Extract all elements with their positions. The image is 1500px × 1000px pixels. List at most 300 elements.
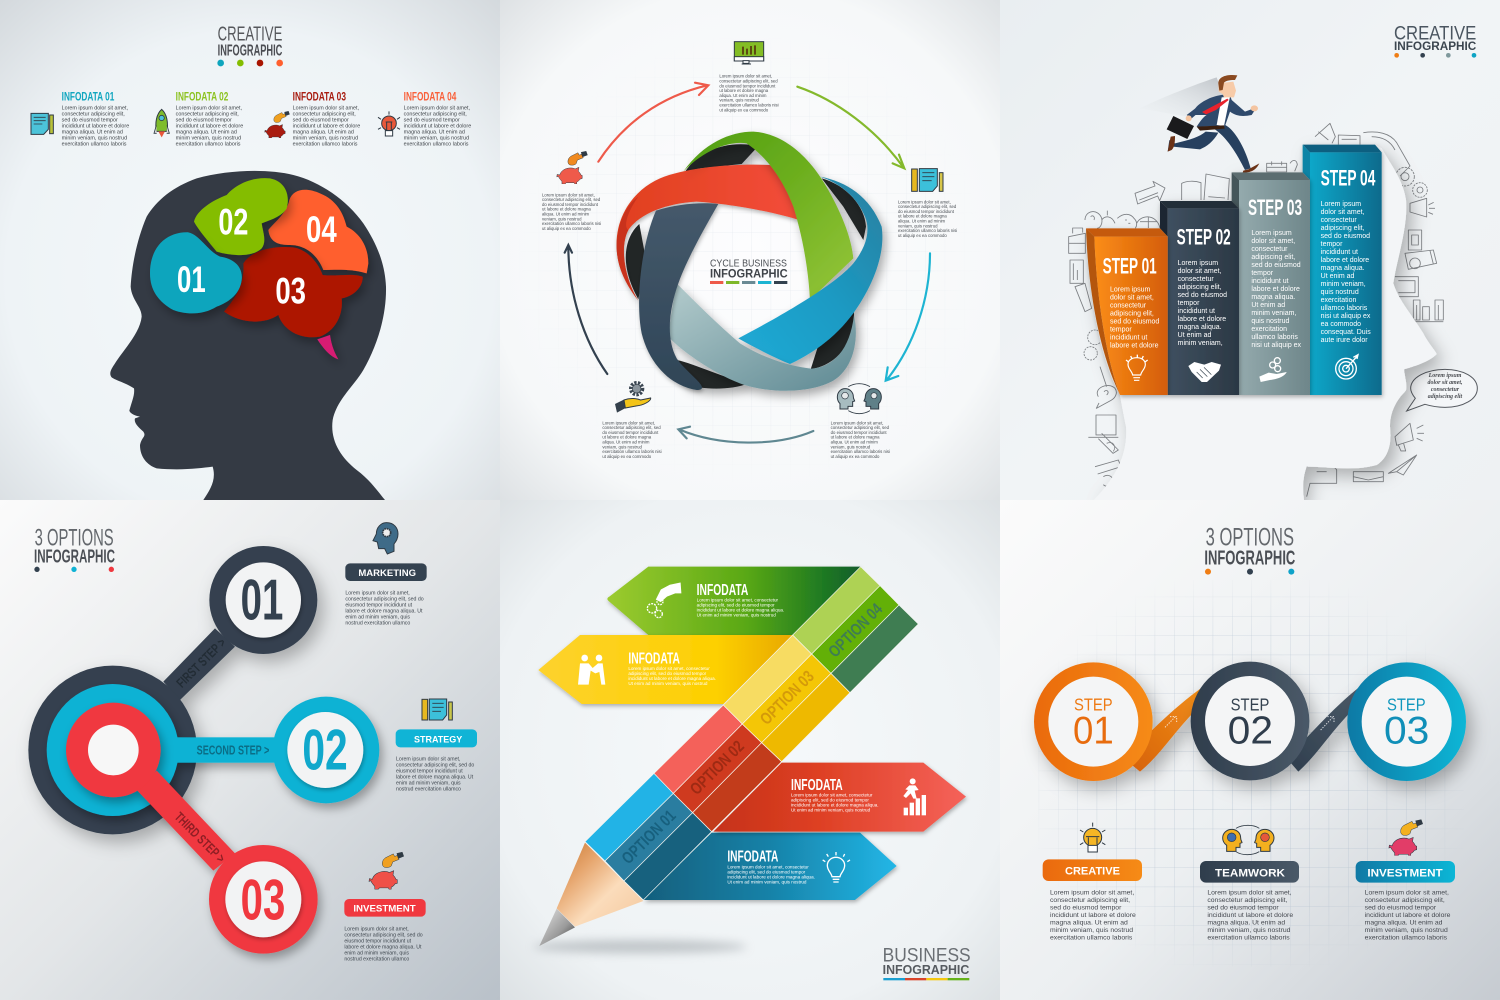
step 02 text: dolor sit amet, [1178, 268, 1222, 275]
text: top: ut labore et dolore magna [719, 88, 769, 93]
hub dark ring and connector 01 [28, 546, 317, 834]
text: left: ut aliquip ex ea commodo [542, 226, 591, 231]
infodata red [791, 777, 879, 813]
icon: monitor chart [734, 42, 764, 64]
infodata 01: minim veniam, quis nostrud [62, 135, 127, 141]
arrow yellow [538, 635, 793, 704]
infodata 02: magna aliqua. Ut enim ad [176, 129, 237, 135]
pencil body [539, 567, 918, 946]
text: teamwork: Lorem ipsum dolor sit amet, [1207, 889, 1292, 896]
icon: bulb white [1126, 355, 1148, 380]
text: creative: exercitation ullamco laboris [1050, 935, 1133, 942]
text: investment: consectetur adipiscing elit, sed do [344, 933, 423, 939]
pill: marketing [345, 563, 427, 581]
text: creative: consectetur adipiscing elit, [1050, 897, 1130, 904]
icon: piggy bank with hand [265, 111, 290, 138]
text: right: aliqua. Ut enim ad minim [898, 219, 946, 224]
infodata yellow: INFODATA [628, 650, 680, 667]
step 03 label: 03 [1384, 708, 1429, 752]
step 02 text: magna aliqua. [1178, 324, 1222, 331]
infodata red: incididunt ut labore et dolore magna aliqua. [791, 803, 879, 808]
text: teamwork: sed do eiusmod tempor [1207, 904, 1279, 911]
pill: teamwork [1200, 861, 1299, 883]
text: marketing: enim ad minim veniam, quis [345, 614, 410, 620]
option labels: OPTION 02 [686, 737, 748, 799]
icon: light bulb [378, 111, 400, 136]
text: bottom right: ut aliquip ex ea commodo [831, 454, 880, 459]
center title: CYCLE BUSINESS [710, 259, 787, 270]
icon: hand with gears [1259, 358, 1287, 382]
arrow: cyan [886, 253, 930, 381]
infodata yellow: incididunt ut labore et dolore magna aliqua. [628, 676, 716, 681]
step 04 text: consequat. Duis [1321, 329, 1371, 336]
pill: strategy: STRATEGY [414, 734, 463, 744]
text: investment: minim veniam, quis nostrud [1365, 927, 1448, 934]
text: investment: labore et dolore magna aliqua. Ut [344, 945, 422, 951]
arrow blue [643, 833, 897, 900]
doodles around the head [1069, 123, 1443, 497]
text: top: Lorem ipsum dolor sit amet, [719, 74, 772, 79]
infodata 03: INFODATA 03 [293, 89, 346, 103]
step 01 text [1103, 253, 1159, 350]
arrow green [607, 567, 861, 635]
text: investment: nostrud exercitation ullamco [344, 957, 409, 963]
lobe 01 [150, 232, 242, 313]
lobe 03: 03 [275, 270, 306, 312]
arrow: navy [565, 245, 607, 374]
step 01 text: Lorem ipsum [1110, 287, 1151, 294]
text: strategy: Lorem ipsum dolor sit amet, [396, 757, 460, 763]
infodata green: incididunt ut labore et dolore magna aliqua. [697, 608, 784, 613]
text: right: veniam, quis nostrud [898, 223, 938, 228]
icon: target [1336, 355, 1358, 379]
title: INFOGRAPHIC [1204, 548, 1295, 570]
text: top: veniam, quis nostrud [719, 98, 759, 103]
head silhouette [110, 171, 386, 500]
title: INFOGRAPHIC [1394, 39, 1476, 53]
infodata 03: minim veniam, quis nostrud [293, 135, 358, 141]
step 01 text: labore et dolore [1110, 343, 1159, 350]
text: creative: Lorem ipsum dolor sit amet, [1050, 889, 1134, 896]
businessman running [1167, 75, 1259, 173]
text: marketing: eiusmod tempor incididunt ut [345, 602, 413, 608]
panel: three step rings infographic [1000, 500, 1500, 1000]
infodata 02: exercitation ullamco laboris [176, 141, 241, 147]
panel: brain infographic [0, 0, 500, 500]
step 03 text [1248, 195, 1302, 349]
text: investment: exercitation ullamco laboris [1365, 935, 1448, 942]
infodata 01: sed do eiusmod tempor [62, 117, 118, 123]
step 03 text: consectetur [1251, 246, 1288, 253]
head cut-out [1086, 145, 1437, 500]
infodata 04: magna aliqua. Ut enim ad [404, 129, 465, 135]
step 04 text: ullamco laboris [1321, 305, 1368, 312]
panel: three steps hub infographic [0, 500, 500, 1000]
step 03 text: STEP 03 [1248, 195, 1302, 220]
infodata green: INFODATA [697, 582, 749, 599]
infodata blue: Lorem ipsum dolor sit amet, consectetur [727, 864, 809, 869]
text: marketing: consectetur adipiscing elit, sed do [345, 596, 424, 602]
infodata yellow: Lorem ipsum dolor sit amet, consectetur [628, 666, 710, 671]
icon: hand with gears [647, 583, 681, 618]
text: strategy: nostrud exercitation ullamco [396, 787, 461, 793]
icon: handshake people [578, 655, 605, 685]
title [1394, 23, 1476, 58]
step 04 text: tempor [1321, 241, 1343, 248]
text: investment: magna aliqua. Ut enim ad [1365, 920, 1443, 927]
infodata green [697, 582, 784, 618]
infodata 02: minim veniam, quis nostrud [176, 135, 241, 141]
text: strategy: eiusmod tempor incididunt ut [396, 769, 463, 775]
infodata yellow: adipiscing elit, sed do eiusmod tempor [628, 671, 707, 676]
title: creative infographic [217, 23, 283, 66]
infodata green: adipiscing elit, sed do eiusmod tempor [697, 603, 775, 608]
infodata 04: consectetur adipiscing elit, [404, 111, 467, 117]
text: creative: minim veniam, quis nostrud [1050, 927, 1133, 934]
bubble with text: dolor sit amet, [1427, 380, 1463, 386]
text: strategy: enim ad minim veniam, quis [396, 781, 461, 787]
icon: handshake [1188, 362, 1221, 382]
step 04 text: nisi ut aliquip ex [1321, 313, 1371, 320]
text: right: exercitation ullamco laboris nisi [898, 228, 957, 233]
icon: note and pencil [31, 113, 53, 134]
infodata blue: adipiscing elit, sed do eiusmod tempor [727, 869, 806, 874]
text: creative: sed do eiusmod tempor [1050, 904, 1122, 911]
text: investment: consectetur adipiscing elit, [1365, 897, 1445, 904]
step 02 text: tempor [1178, 300, 1200, 307]
text: teamwork: incididunt ut labore et dolore [1207, 912, 1293, 919]
text: teamwork: minim veniam, quis nostrud [1207, 927, 1291, 934]
step 04 text: exercitation [1321, 297, 1356, 304]
text: marketing: Lorem ipsum dolor sit amet, [345, 590, 410, 596]
step 04 text: Lorem ipsum [1321, 201, 1361, 208]
infodata green: Lorem ipsum dolor sit amet, consectetur [697, 598, 779, 603]
step 01 text: tempor [1110, 327, 1132, 334]
step 04 text: aute irure dolor [1321, 337, 1368, 344]
circle 02 [287, 712, 363, 788]
circle 02: 02 [302, 719, 348, 783]
connector label: third step: THIRD STEP > [172, 809, 228, 866]
hub centre [88, 725, 139, 775]
step 03 text: labore et dolore [1251, 286, 1300, 293]
infodata 04: Lorem ipsum dolor sit amet, [404, 105, 470, 111]
infodata 04: incididunt ut labore et dolore [404, 123, 471, 129]
ribbons knot [617, 132, 882, 391]
step 02 text: Lorem ipsum [1178, 260, 1218, 267]
step 04 text: ea commodo [1321, 321, 1361, 328]
text: top: ut aliquip ex ea commodo [719, 107, 769, 112]
text: left: veniam, quis nostrud [542, 216, 582, 221]
lobe 01: 01 [177, 258, 206, 300]
infodata 01 [62, 89, 129, 147]
pill: marketing: MARKETING [358, 568, 416, 578]
bubble with text: consectetur [1431, 387, 1460, 393]
infodata 02: incididunt ut labore et dolore [176, 123, 243, 129]
infodata 01: Lorem ipsum dolor sit amet, [62, 105, 128, 111]
infodata blue: Ut enim ad minim veniam, quis nostrud [727, 879, 807, 884]
icon: teamwork heads [1223, 825, 1274, 855]
cyan ring and connector 02 [47, 684, 379, 816]
infodata 01: incididunt ut labore et dolore [62, 123, 129, 129]
ribbon slate [668, 283, 856, 391]
lobe 04: 04 [306, 208, 337, 250]
ring 01 with ribbon [1034, 662, 1204, 781]
step 03 label: STEP [1387, 695, 1426, 715]
text: bottom right: Lorem ipsum dolor sit amet, [831, 420, 883, 425]
text: left: Lorem ipsum dolor sit amet, [542, 192, 595, 197]
step 01 label: STEP [1074, 695, 1113, 715]
step 04 text: adipiscing elit, [1321, 225, 1365, 232]
brain: lobes and numbers [150, 178, 368, 359]
icon: piggy bank with coin hand [557, 151, 588, 184]
step 04 text: dolor sit amet, [1321, 209, 1365, 216]
text: right: ut labore et dolore magna [898, 214, 947, 219]
icon: piggy bank [1389, 819, 1423, 856]
bars [1086, 145, 1382, 395]
text: bottom left: ut aliquip ex ea commodo [602, 454, 652, 459]
text: bottom right: veniam, quis nostrud [831, 444, 871, 449]
lobe 02: 02 [218, 201, 248, 243]
bar 02 [1160, 201, 1239, 395]
step 04 text [1321, 165, 1376, 344]
title: BUSINESS [883, 946, 971, 967]
step 01 text: incididunt ut [1110, 335, 1147, 342]
infodata 01: INFODATA 01 [62, 89, 115, 103]
infodata 03: sed do eiusmod tempor [293, 117, 349, 123]
circle 01 [226, 562, 301, 638]
step 02 text: labore et dolore [1178, 316, 1226, 323]
step 01 label: 01 [1073, 708, 1114, 752]
pill: investment [1356, 861, 1455, 883]
step 04 text: Ut enim ad [1321, 273, 1355, 280]
icon: hand with gear [615, 383, 651, 413]
panel: steps head infographic [1000, 0, 1500, 500]
connector label: second step: SECOND STEP > [197, 743, 269, 758]
step 03 text: exercitation [1251, 326, 1287, 333]
text: investment: eiusmod tempor incididunt ut [344, 939, 412, 945]
step 03 text: quis nostrud [1251, 318, 1289, 325]
center title [710, 259, 788, 284]
infodata 04: INFODATA 04 [404, 89, 457, 103]
text: strategy: labore et dolore magna aliqua. Ut [396, 775, 474, 781]
step 02 text: incididunt ut [1178, 308, 1215, 315]
icon: bulb outline [823, 852, 850, 882]
title: 3 OPTIONS [1206, 524, 1294, 552]
tip wood [557, 843, 643, 927]
bubble with text: adipiscing elit [1428, 394, 1463, 400]
pill: creative: CREATIVE [1065, 866, 1120, 878]
text: top: do eiusmod tempor incididunt [719, 83, 776, 88]
text: bottom left: Lorem ipsum dolor sit amet, [602, 420, 655, 425]
pill: creative [1043, 859, 1142, 881]
segment yellow [723, 635, 850, 762]
text: bottom left: ut labore et dolore magna [602, 435, 652, 440]
text: investment: Lorem ipsum dolor sit amet, [344, 927, 409, 933]
infodata 03: consectetur adipiscing elit, [293, 111, 356, 117]
infodata 01: exercitation ullamco laboris [62, 141, 127, 147]
infodata 02: consectetur adipiscing elit, [176, 111, 239, 117]
red ring and connector 03 [66, 703, 318, 954]
step 03 text: Lorem ipsum [1251, 230, 1292, 237]
panel: pencil infographic [500, 500, 1000, 1000]
title [34, 525, 115, 572]
step 03 text: minim veniam, [1251, 310, 1296, 317]
title [883, 946, 971, 980]
text: top: aliqua. Ut enim ad minim [719, 93, 767, 98]
text: marketing: labore et dolore magna aliqua. Ut [345, 608, 423, 614]
infodata 03: incididunt ut labore et dolore [293, 123, 360, 129]
bar 03 [1232, 172, 1310, 395]
pill: investment: INVESTMENT [353, 904, 416, 914]
step 04 text: incididunt ut [1321, 249, 1358, 256]
ribbon backs [626, 144, 866, 389]
text: investment: incididunt ut labore et dolore [1365, 912, 1451, 919]
infodata 01: consectetur adipiscing elit, [62, 111, 125, 117]
arrow: slate [678, 427, 813, 443]
step 04 text: sed do eiusmod [1321, 233, 1370, 240]
infodata 03: exercitation ullamco laboris [293, 141, 358, 147]
text: bottom right: do eiusmod tempor incididunt [831, 430, 887, 435]
bubble with text: Lorem ipsum [1428, 373, 1462, 379]
icon: lightbulb [1080, 823, 1105, 852]
infodata 04: minim veniam, quis nostrud [404, 135, 469, 141]
title: creative infographic: CREATIVE [218, 23, 282, 46]
title: creative infographic: INFOGRAPHIC [218, 42, 282, 59]
icon: runner on bars [903, 778, 926, 815]
ribbon red shade [617, 197, 638, 301]
step 02 text: sed do eiusmod [1178, 292, 1227, 299]
title: CREATIVE [1394, 23, 1476, 44]
text: right: do eiusmod tempor incididunt [898, 209, 955, 214]
arrow: green [797, 87, 904, 168]
infodata blue: incididunt ut labore et dolore magna aliqua. [727, 874, 815, 879]
infodata red: Ut enim ad minim veniam, quis nostrud [791, 808, 871, 813]
ribbon red [617, 165, 799, 301]
infodata 02: sed do eiusmod tempor [176, 117, 232, 123]
connector label: first step: FIRST STEP > [173, 635, 229, 690]
infodata 03: Lorem ipsum dolor sit amet, [293, 105, 359, 111]
center title: INFOGRAPHIC [710, 266, 788, 280]
step 02 text [1177, 224, 1231, 347]
segment red [654, 705, 782, 832]
step 02 label: 02 [1228, 708, 1273, 752]
text: left: exercitation ullamco laboris nisi [542, 221, 601, 226]
title: INFOGRAPHIC [34, 546, 115, 567]
text: left: consectetur adipiscing elit, sed [542, 197, 601, 202]
ribbon arrows [1165, 716, 1334, 730]
text: teamwork: magna aliqua. Ut enim ad [1207, 920, 1285, 927]
infodata blue: INFODATA [727, 849, 779, 866]
icon: two heads [837, 384, 881, 414]
step 03 text: magna aliqua. [1251, 294, 1295, 301]
infodata yellow [628, 650, 716, 686]
step 03 text: nisi ut aliquip ex [1251, 342, 1302, 349]
pill: investment: INVESTMENT [1367, 867, 1443, 879]
step 03 text: sed do eiusmod [1251, 262, 1301, 269]
text: bottom left: veniam, quis nostrud [602, 444, 642, 449]
text: bottom left: do eiusmod tempor incididunt [602, 430, 659, 435]
infodata green: Ut enim ad minim veniam, quis nostrud [697, 613, 776, 618]
circle 03: 03 [241, 868, 285, 932]
step 04 text: quis nostrud [1321, 289, 1359, 296]
step 03 text: incididunt ut [1251, 278, 1289, 285]
step 04 text: magna aliqua. [1321, 265, 1365, 272]
option labels: OPTION 01 [618, 806, 680, 868]
text: bottom right: aliqua. Ut enim ad minim [831, 440, 878, 445]
infodata 03 [293, 89, 360, 147]
step 04 text: STEP 04 [1321, 165, 1376, 190]
infodata red: INFODATA [791, 777, 843, 794]
icon: ruler, note and pencil [912, 169, 943, 191]
step 02 text: STEP 02 [1177, 224, 1231, 249]
infodata yellow: Ut enim ad minim veniam, quis nostrud [628, 681, 708, 686]
text: top: consectetur adipiscing elit, sed [719, 78, 778, 83]
step 01 text: dolor sit amet, [1110, 295, 1154, 302]
lobe 02 [194, 178, 288, 255]
tip lead [539, 909, 575, 946]
icon: piggy bank [369, 852, 404, 889]
infodata 02 [176, 89, 243, 147]
text: creative: incididunt ut labore et dolore [1050, 912, 1136, 919]
bar 04 [1303, 145, 1382, 395]
text: bottom left: aliqua. Ut enim ad minim [602, 440, 650, 445]
title: INFOGRAPHIC [883, 962, 970, 977]
infodata 01: magna aliqua. Ut enim ad [62, 129, 123, 135]
title: 3 OPTIONS [35, 525, 114, 552]
step 01 text: consectetur [1110, 303, 1147, 310]
text: investment: sed do eiusmod tempor [1365, 904, 1437, 911]
text: left: do eiusmod tempor incididunt [542, 202, 599, 207]
text: right: ut aliquip ex ea commodo [898, 233, 947, 238]
step 03 text: dolor sit amet, [1251, 238, 1295, 245]
text: teamwork: exercitation ullamco laboris [1207, 935, 1290, 942]
ring 03 [1347, 662, 1466, 781]
text: right: consectetur adipiscing elit, sed [898, 204, 957, 209]
panel: cycle infographic [500, 0, 1000, 500]
step 01 text: sed do eiusmod [1110, 319, 1159, 326]
segment blue [585, 773, 712, 900]
infodata blue [727, 849, 815, 884]
text: bottom right: exercitation ullamco laboris nisi [831, 449, 890, 454]
lobe 03 [224, 247, 363, 359]
infodata red: adipiscing elit, sed do eiusmod tempor [791, 798, 869, 803]
pill: investment [344, 899, 426, 917]
text: strategy: consectetur adipiscing elit, sed do [396, 763, 474, 769]
text: teamwork: consectetur adipiscing elit, [1207, 897, 1288, 904]
text: bottom right: ut labore et dolore magna [831, 435, 880, 440]
text: bottom right: consectetur adipiscing elit, sed [831, 425, 890, 430]
step 02 text: adipiscing elit, [1178, 284, 1222, 291]
pill: strategy [396, 729, 477, 747]
step 03 text: Ut enim ad [1251, 302, 1285, 309]
text: investment: Lorem ipsum dolor sit amet, [1365, 889, 1449, 896]
step 02 text: consectetur [1178, 276, 1214, 283]
step 01 text: adipiscing elit, [1110, 311, 1154, 318]
step 02 text: minim veniam, [1178, 340, 1223, 347]
step 03 text: ullamco laboris [1251, 334, 1298, 341]
circle 03 [225, 861, 301, 937]
ribbon green [683, 132, 853, 300]
step 01 text: STEP 01 [1103, 253, 1157, 278]
text: creative: magna aliqua. Ut enim ad [1050, 920, 1128, 927]
option labels: OPTION 03 [756, 667, 818, 729]
icon: ruler, note, pencil [422, 699, 452, 720]
pill: teamwork: TEAMWORK [1215, 867, 1285, 879]
step 02 text: Ut enim ad [1178, 332, 1212, 339]
infodata red: Lorem ipsum dolor sit amet, consectetur [791, 793, 873, 798]
option labels: OPTION 04 [824, 599, 887, 661]
text: left: ut labore et dolore magna [542, 207, 591, 212]
